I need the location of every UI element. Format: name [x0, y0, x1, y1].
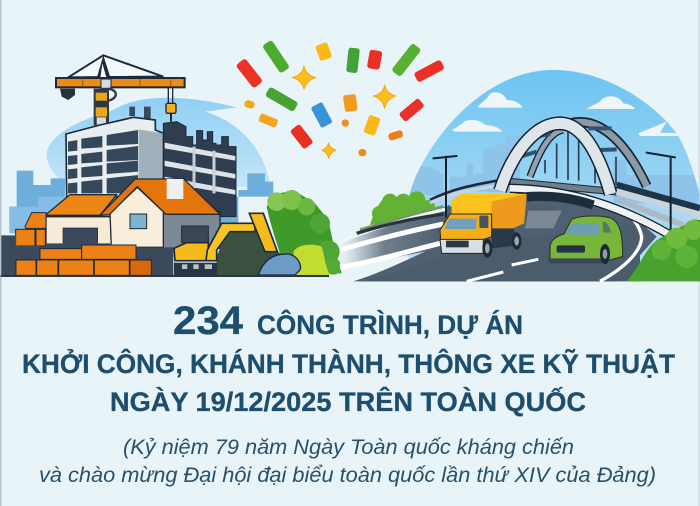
sky blob [47, 98, 271, 187]
bush right [627, 219, 700, 281]
subtitle line 2: và chào mừng Đại hội đại biểu toàn quốc lần thứ XIV của Đảng) [39, 463, 656, 487]
subtitle line 1: (Kỷ niệm 79 năm Ngày Toàn quốc kháng chiến [123, 435, 574, 459]
car [548, 216, 623, 264]
heading line 3: NGÀY 19/12/2025 TRÊN TOÀN QUỐC [110, 387, 586, 417]
heading line 1: CÔNG TRÌNH, DỰ ÁN [257, 310, 523, 340]
crane [56, 55, 185, 125]
distant skyline [410, 135, 700, 203]
heading line 1: 234 [173, 299, 244, 343]
road [340, 191, 657, 281]
bush [267, 190, 342, 275]
rooftop vents [129, 107, 151, 119]
heading line 1 [173, 299, 523, 343]
skyline [9, 171, 273, 233]
house [45, 179, 220, 248]
clouds [452, 92, 680, 136]
bridge [430, 122, 700, 234]
heading [22, 299, 675, 417]
heading line 2: KHỞI CÔNG, KHÁNH THÀNH, THÔNG XE KỸ THUẬT [22, 349, 675, 379]
ground line [1, 275, 329, 277]
street lamps [433, 153, 675, 233]
subtitle [39, 435, 656, 487]
boulder [258, 254, 300, 275]
truck [440, 194, 527, 258]
confetti pieces [236, 40, 445, 156]
bush left [370, 191, 435, 225]
bricks [16, 213, 151, 275]
illustration: construction site [1, 55, 342, 277]
ground wall [1, 235, 173, 275]
sparkles [292, 66, 396, 158]
confetti [236, 40, 445, 158]
tower right [163, 122, 236, 217]
excavator [174, 213, 280, 275]
tower left [66, 117, 163, 197]
illustration: bridge and road [340, 70, 700, 283]
sky dome [408, 70, 700, 262]
